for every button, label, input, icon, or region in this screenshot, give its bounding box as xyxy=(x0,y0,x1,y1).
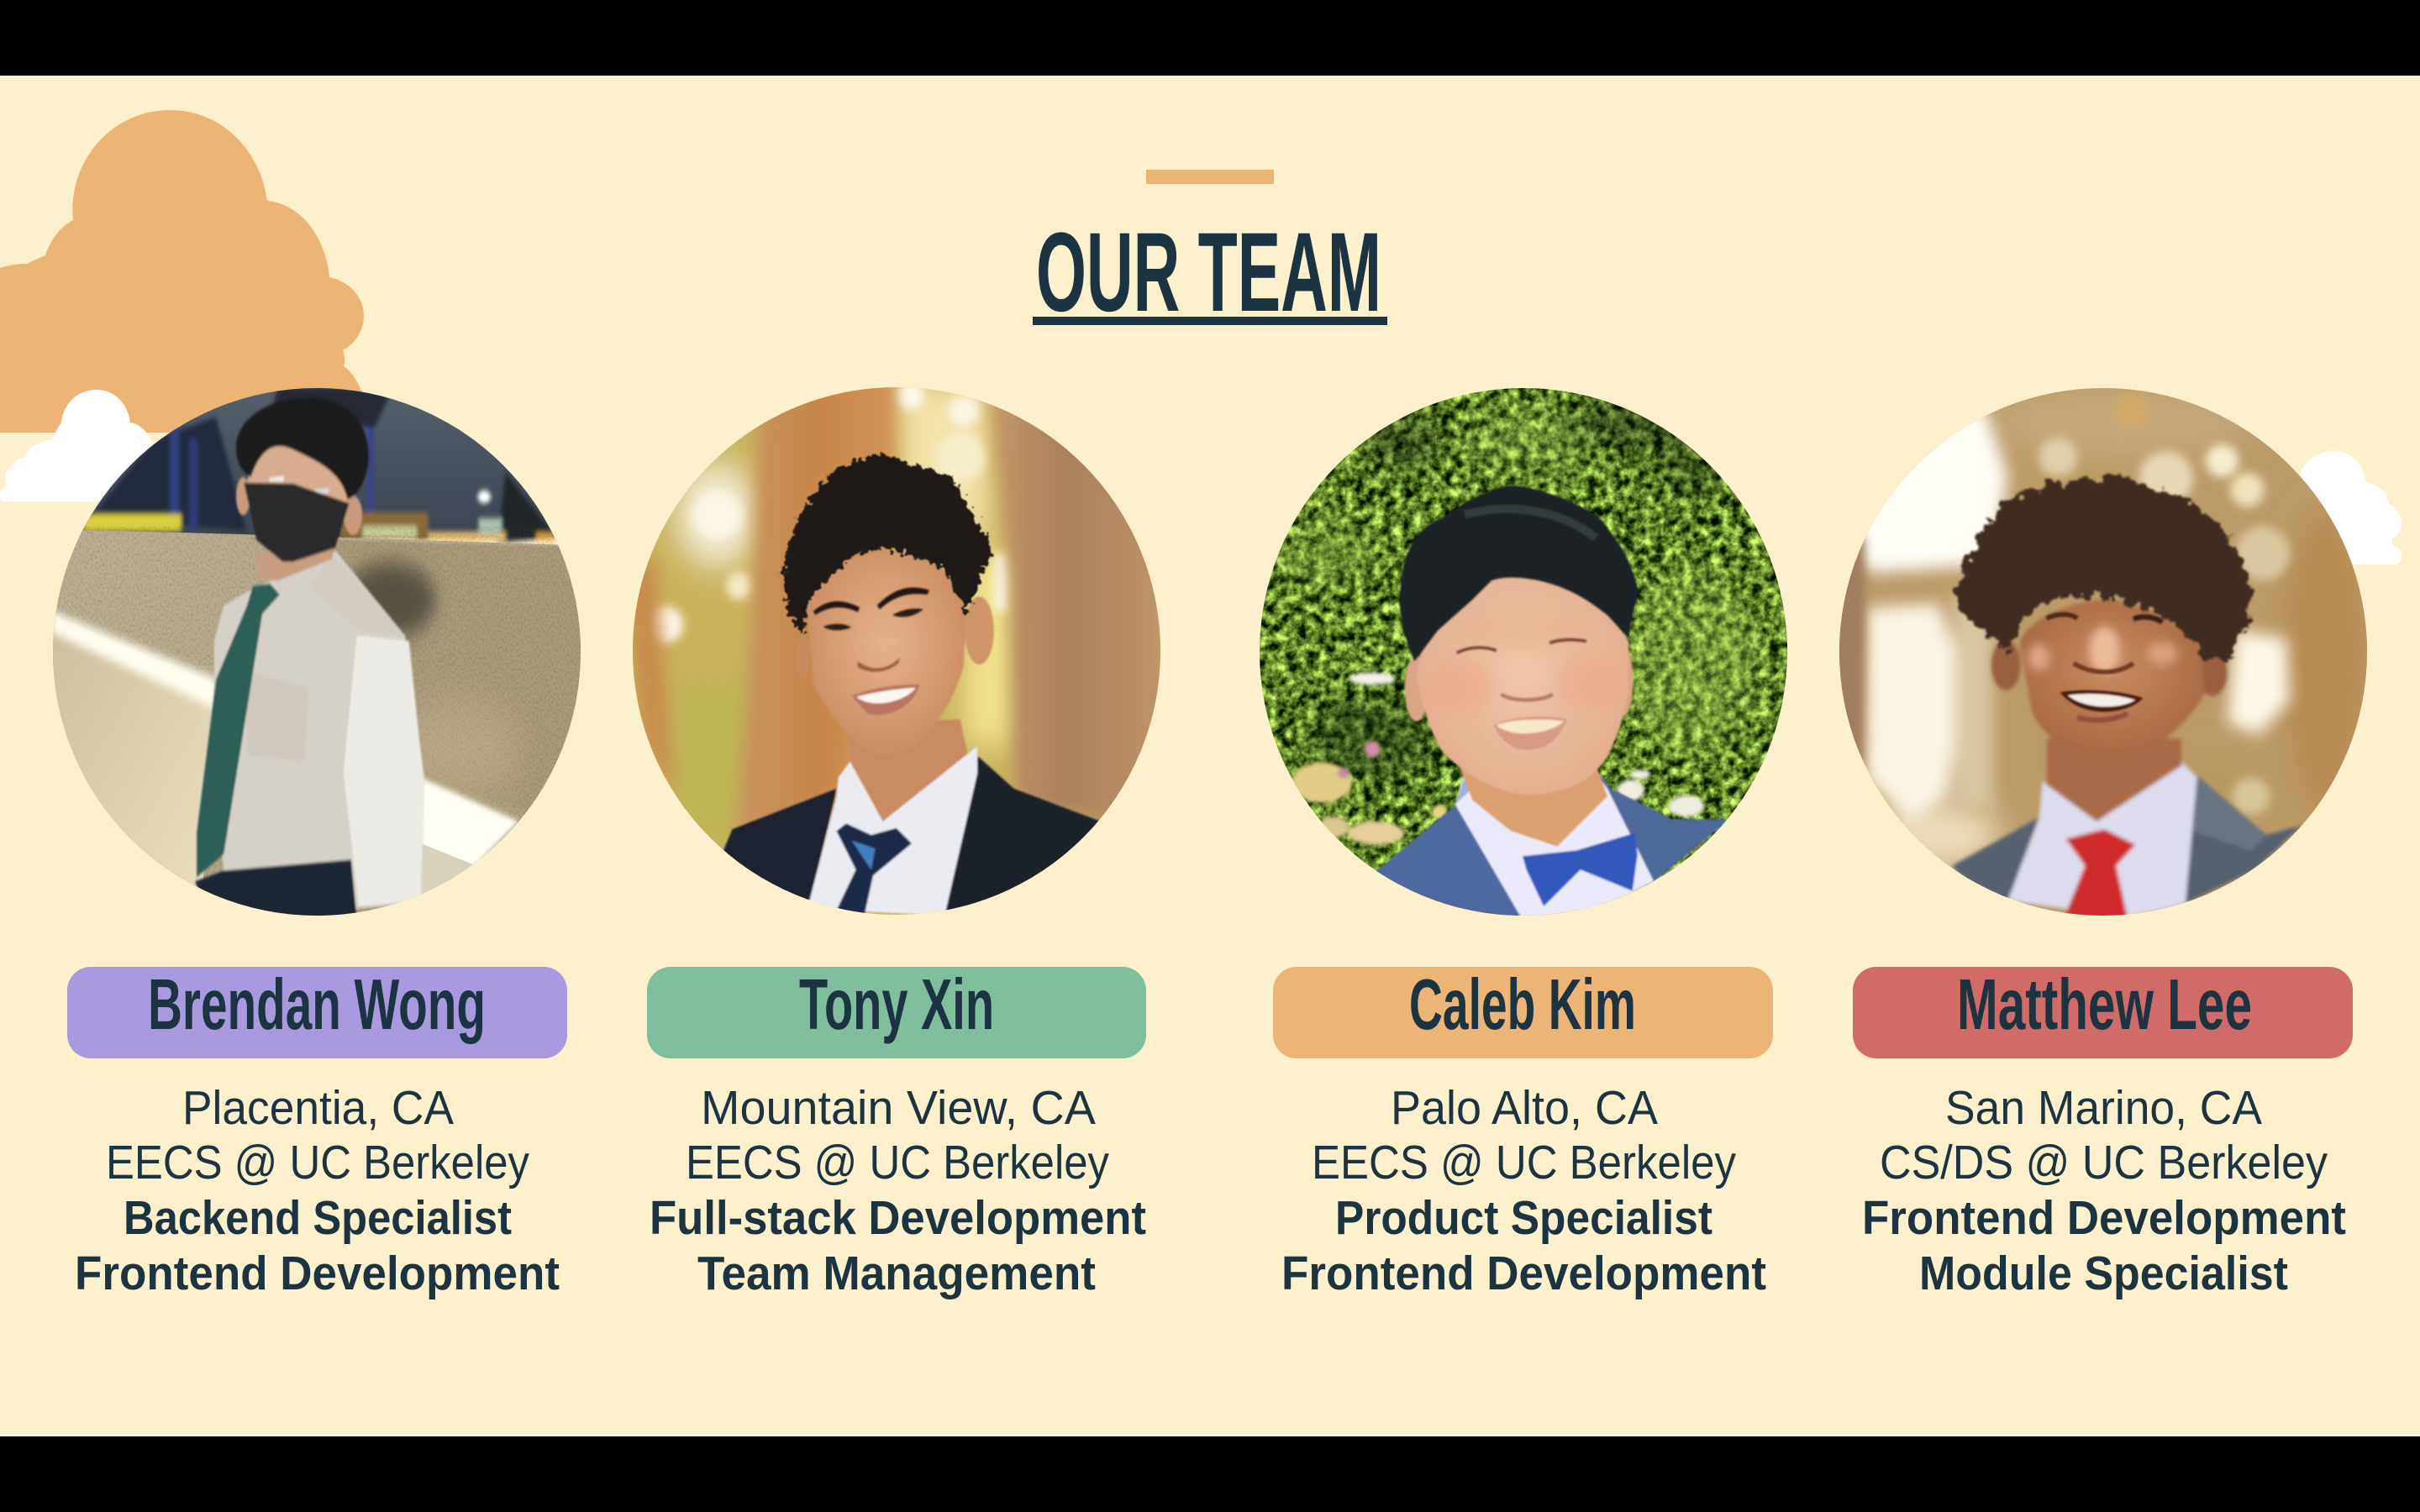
tie xyxy=(197,584,280,877)
neck xyxy=(2047,738,2181,822)
shirt xyxy=(1455,774,1654,920)
name pill: Caleb Kim xyxy=(1273,965,1773,1058)
eyes and brows xyxy=(813,601,860,615)
details: Tony Xin: Full-stack Development xyxy=(650,1191,1146,1245)
name pill: Matthew Lee: Matthew Lee xyxy=(1957,965,2252,1045)
tie xyxy=(2064,829,2135,918)
panel: Brendan Wong xyxy=(39,373,598,1300)
bow tie xyxy=(1523,833,1638,906)
nose xyxy=(2074,664,2133,672)
smile xyxy=(1494,717,1567,750)
details: Matthew Lee: Frontend Development xyxy=(1862,1191,2346,1245)
panel: Matthew Lee xyxy=(1830,384,2375,1300)
hair xyxy=(1954,476,2251,661)
white cloud right xyxy=(2294,451,2402,564)
face and hair xyxy=(247,438,350,504)
neck xyxy=(1460,769,1607,847)
name pill: Tony Xin xyxy=(647,965,1146,1058)
details: Caleb Kim: Product Specialist xyxy=(1335,1191,1712,1245)
ear xyxy=(965,596,994,664)
details: Tony Xin: EECS @ UC Berkeley xyxy=(686,1136,1109,1189)
jacket xyxy=(1376,804,1527,924)
flowers xyxy=(1292,673,1704,844)
shirt xyxy=(2008,762,2197,918)
details: Caleb Kim: Palo Alto, CA xyxy=(1391,1081,1658,1135)
jacket xyxy=(1952,817,2039,900)
photo: Caleb Kim xyxy=(1253,384,1792,924)
nose xyxy=(858,658,900,672)
hair xyxy=(782,453,991,637)
photo: Brendan Wong xyxy=(39,373,598,920)
title xyxy=(1033,210,1387,335)
name pill: Tony Xin: Tony Xin xyxy=(799,965,994,1045)
neck xyxy=(256,543,336,581)
photo: Matthew Lee xyxy=(1830,384,2375,924)
top black bar xyxy=(0,0,2420,76)
name pill: Brendan Wong xyxy=(67,965,567,1058)
panel: Tony Xin xyxy=(620,376,1176,1300)
eyes xyxy=(1457,648,1497,653)
jacket xyxy=(721,789,837,916)
details: Brendan Wong xyxy=(75,1081,560,1300)
details: Brendan Wong: EECS @ UC Berkeley xyxy=(106,1136,529,1189)
white cloud left xyxy=(0,390,168,501)
ears xyxy=(1991,640,2021,690)
details: Matthew Lee xyxy=(1862,1081,2346,1300)
smile xyxy=(2060,690,2143,711)
details: Caleb Kim: EECS @ UC Berkeley xyxy=(1312,1136,1736,1189)
details: Caleb Kim xyxy=(1281,1081,1766,1300)
shirt xyxy=(808,746,977,916)
panel: Caleb Kim xyxy=(1253,384,1792,1300)
pants xyxy=(195,859,357,920)
details: Tony Xin: Mountain View, CA xyxy=(701,1081,1096,1135)
tie xyxy=(837,823,912,916)
name pill: Brendan Wong: Brendan Wong xyxy=(148,965,486,1045)
face xyxy=(1417,546,1628,795)
details: Matthew Lee: Module Specialist xyxy=(1919,1247,2288,1300)
smile xyxy=(852,685,919,715)
hair xyxy=(1399,486,1639,661)
accent bar xyxy=(1146,170,1274,184)
title: OUR TEAM xyxy=(1036,210,1381,335)
orange cloud xyxy=(0,110,364,433)
bottom black bar xyxy=(0,1436,2420,1512)
ears xyxy=(1405,655,1428,722)
details: Matthew Lee: San Marino, CA xyxy=(1945,1081,2262,1135)
neck xyxy=(848,719,968,822)
name pill: Caleb Kim: Caleb Kim xyxy=(1409,965,1636,1045)
details: Brendan Wong: Frontend Development xyxy=(75,1247,560,1300)
details: Brendan Wong: Placentia, CA xyxy=(182,1081,454,1135)
details: Brendan Wong: Backend Specialist xyxy=(124,1191,512,1245)
details: Tony Xin: Team Management xyxy=(697,1247,1096,1300)
details: Tony Xin xyxy=(650,1081,1146,1300)
nose xyxy=(1502,694,1553,700)
details: Matthew Lee: CS/DS @ UC Berkeley xyxy=(1880,1136,2328,1189)
mask xyxy=(244,482,350,562)
face xyxy=(2019,600,2205,755)
name pill: Matthew Lee xyxy=(1853,965,2353,1058)
details: Caleb Kim: Frontend Development xyxy=(1281,1247,1766,1300)
photo: Tony Xin xyxy=(620,376,1176,920)
eyes xyxy=(2047,614,2077,618)
shirt xyxy=(214,551,424,909)
face xyxy=(806,551,965,755)
